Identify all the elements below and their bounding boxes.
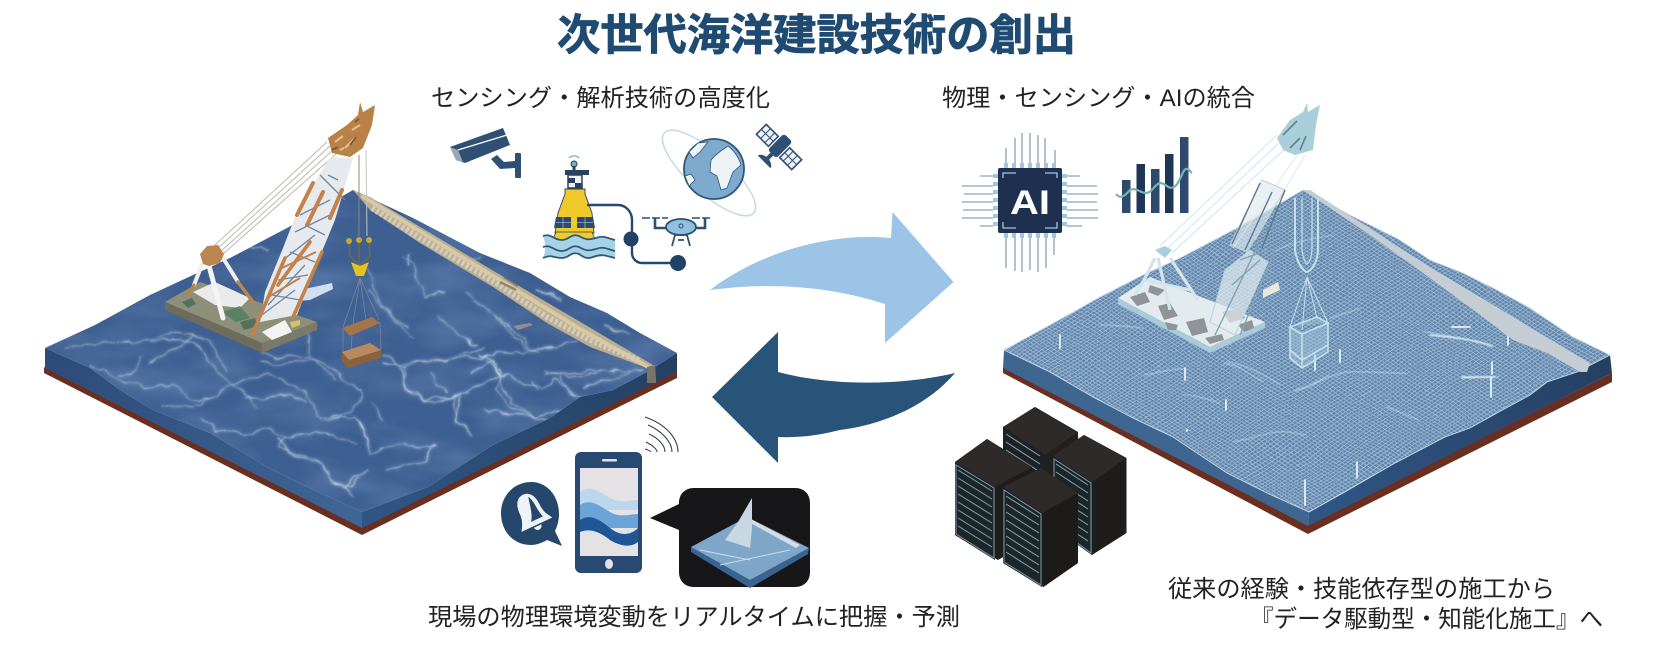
A-frame [187, 245, 253, 318]
platform side faces [1003, 350, 1309, 526]
water caustic lines [55, 220, 676, 505]
arrow: dark blue, to real site [712, 332, 955, 463]
hologram cables [1160, 135, 1305, 253]
heading: sensing and analysis: センシング・解析技術の高度化 [431, 85, 770, 112]
water waves under buoy [543, 235, 615, 258]
arrow: light blue, to digital twin [710, 212, 954, 343]
icon: buoy [543, 156, 615, 258]
barge [165, 282, 317, 353]
rack front [1003, 468, 1078, 587]
data ticks [1060, 327, 1508, 505]
caption: data driven construction: 従来の経験・技能依存型の施工から [1168, 576, 1555, 603]
lower cargo block [342, 343, 381, 368]
water surface [45, 190, 677, 512]
breakwater wireframe [1303, 190, 1590, 372]
connector line: buoy to drone [587, 205, 686, 271]
platform base edge [44, 367, 677, 535]
crane head [328, 102, 375, 157]
icon: AI chip: AI [1010, 184, 1050, 222]
caption: data driven construction [1168, 576, 1603, 633]
icon: surveillance camera [450, 128, 521, 178]
icon: AI chip [962, 133, 1098, 272]
hologram crane head [1277, 103, 1320, 155]
icon: wifi signal arcs [645, 417, 678, 452]
server racks [955, 407, 1126, 587]
chip traces [962, 133, 1098, 272]
small vessel [513, 323, 533, 330]
hologram boom [1210, 180, 1285, 335]
icon: globe with orbit [651, 118, 767, 228]
bar chart with trend line [1116, 137, 1192, 213]
rack right [1053, 435, 1126, 555]
chip pins [996, 166, 1064, 236]
glowing wave crests [1060, 235, 1508, 505]
heading: physics sensing AI: 物理・センシング・AIの統合 [942, 85, 1255, 112]
upper cargo frame [342, 317, 380, 336]
hologram A-frame [1135, 258, 1198, 310]
icon: drone [642, 218, 712, 246]
icon: bell speech bubble [501, 482, 562, 546]
platform base edge [1003, 367, 1612, 534]
rack left [955, 439, 1032, 560]
main boom [252, 157, 353, 335]
hook and cargo [342, 237, 381, 368]
title: 次世代海洋建設技術の創出 [557, 12, 1076, 60]
hologram barge [1118, 277, 1265, 353]
black preview bubble with mini platform [650, 488, 810, 588]
caption: data driven construction: 『データ駆動型・知能化施工』へ [1250, 606, 1603, 633]
platform side faces [45, 348, 362, 528]
hologram hook and cargo [1290, 198, 1328, 368]
crane hoist cables [214, 142, 367, 254]
support boat [277, 283, 333, 302]
rack back [1003, 407, 1078, 520]
icon: smartphone with wave chart [575, 452, 642, 573]
left panel: real ocean platform [30, 102, 690, 535]
caption: real-time monitoring: 現場の物理環境変動をリアルタイムに把握・予測 [428, 604, 960, 631]
breakwater [353, 190, 656, 383]
icon: satellite [746, 120, 806, 180]
mini twin platform [691, 498, 809, 588]
water mesh surface [1004, 190, 1610, 512]
right panel: digital twin platform [980, 103, 1640, 540]
